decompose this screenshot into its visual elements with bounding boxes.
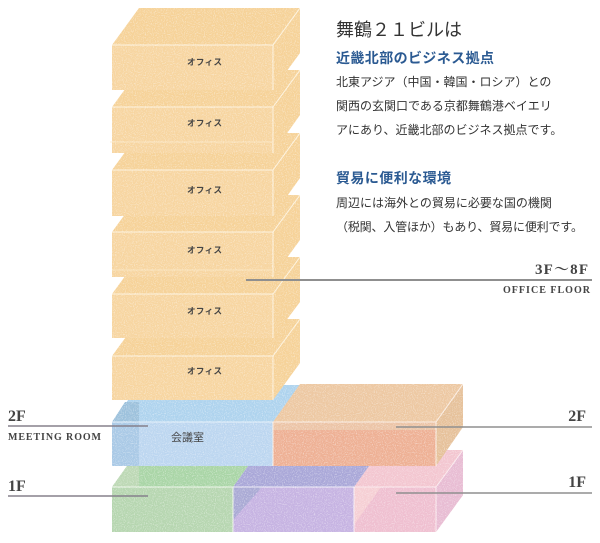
body text: business base <box>336 74 562 137</box>
office floor labels: オフィス <box>187 57 222 67</box>
office tower floors 3F to 8F <box>110 8 300 400</box>
office floor labels <box>187 57 222 376</box>
lower building floors <box>112 384 463 532</box>
office floor labels: オフィス <box>187 245 222 255</box>
floor 1F: green block <box>112 466 248 532</box>
callout: left 1F <box>8 478 148 496</box>
office floor 6F <box>112 133 300 216</box>
floor 1F: pink shop block <box>354 450 463 532</box>
office floor 3F <box>112 319 300 400</box>
callout: 3F to 8F office floor <box>246 262 592 296</box>
office floor labels: オフィス <box>187 185 222 195</box>
floor 2F: blue meeting room block <box>112 385 300 466</box>
office floor labels: オフィス <box>187 118 222 128</box>
callout: left 2F meeting room: 2F <box>8 408 26 425</box>
heading: business base: 近畿北部のビジネス拠点 <box>336 50 494 66</box>
callout: 3F to 8F office floor: OFFICE FLOOR <box>503 285 591 296</box>
callout: left 2F meeting room <box>8 408 148 443</box>
floor 1F: purple block <box>233 466 369 532</box>
office floor labels: オフィス <box>187 306 222 316</box>
callout: 3F to 8F office floor: 3F～8F <box>535 262 588 278</box>
callout: right 2F: 2F <box>568 408 586 425</box>
office floor 4F <box>112 257 300 338</box>
callout: left 1F: 1F <box>8 478 26 495</box>
callout: right 1F: 1F <box>568 474 586 491</box>
body text: business base: アにあり、近畿北部のビジネス拠点です。 <box>336 123 562 137</box>
office floor 7F <box>110 70 300 153</box>
meeting room label: 会議室 <box>171 430 204 444</box>
floor 2F: salmon block <box>273 384 463 466</box>
office floor 8F <box>112 8 300 90</box>
body text: trade: 周辺には海外との貿易に必要な国の機関 <box>336 196 552 210</box>
callout: left 2F meeting room: MEETING ROOM <box>8 432 102 443</box>
heading: trade: 貿易に便利な環境 <box>336 170 451 186</box>
body text: trade: （税関、入管ほか）もあり、貿易に便利です。 <box>336 219 583 234</box>
body text: business base: 北東アジア（中国・韓国・ロシア）との <box>336 74 551 89</box>
office floor 5F <box>112 195 300 277</box>
body text: trade <box>336 196 583 234</box>
section: convenient for trade <box>336 170 583 234</box>
body text: business base: 関西の玄関口である京都舞鶴港ベイエリ <box>336 99 552 113</box>
title: 舞鶴２１ビルは <box>336 20 462 40</box>
section: northern Kinki business base <box>336 50 562 137</box>
office floor labels: オフィス <box>187 366 222 376</box>
